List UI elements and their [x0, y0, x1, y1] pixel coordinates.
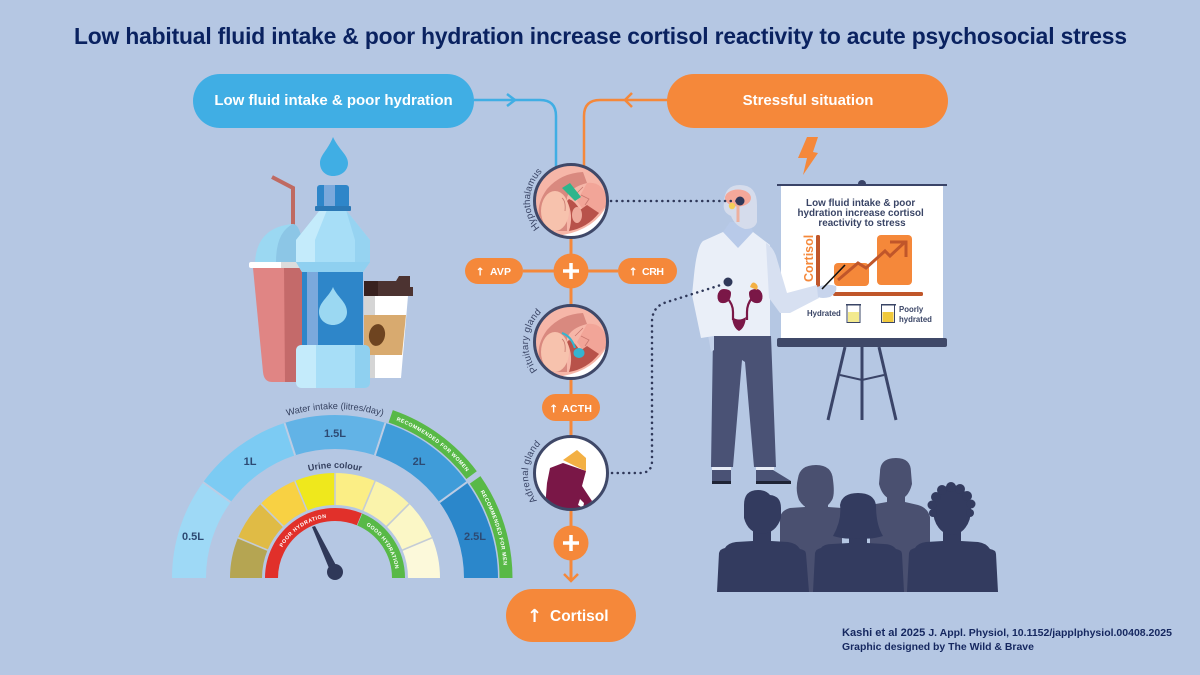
- head: [724, 185, 757, 229]
- presenter figure: [692, 185, 845, 484]
- chart: urine colour gauge: [230, 462, 440, 580]
- front row person one: [717, 490, 809, 592]
- pill: stressful situation: Stressful situation: [743, 92, 873, 109]
- easel legs: [828, 347, 896, 420]
- legend: hydrated: [807, 304, 861, 322]
- pill: cortisol: ↑: [527, 606, 542, 627]
- connector: blue arrow from low fluid intake to hypothalamus: [474, 94, 556, 168]
- organ: adrenal gland: [534, 436, 608, 510]
- pill: low fluid intake: Low fluid intake & poor hydration: [214, 92, 453, 109]
- pill: CRH: ↑: [628, 266, 638, 278]
- left hand: [708, 335, 714, 352]
- band: recommended for women: [388, 410, 477, 479]
- pill: AVP: ↑: [476, 266, 485, 278]
- water volume labels: 2L: [413, 456, 426, 468]
- band: poor hydration: [265, 508, 362, 578]
- label: urine colour: Urine colour: [308, 462, 362, 471]
- water volume labels: 1.5L: [324, 428, 346, 440]
- board heading: hydration increase cortisol: [798, 208, 924, 219]
- back row person left: [780, 465, 842, 592]
- pill: AVP: AVP: [490, 266, 511, 278]
- board heading: reactivity to stress: [818, 218, 906, 229]
- water volume labels: [182, 428, 486, 543]
- pill: AVP: [465, 258, 523, 284]
- pill: stressful situation: [667, 74, 948, 128]
- water volume labels: 2.5L: [464, 531, 486, 543]
- band: good hydration: [357, 514, 405, 578]
- board chart: cortisol: [802, 235, 923, 296]
- pill: ACTH: ↑: [549, 402, 558, 416]
- right arm: [766, 243, 819, 313]
- citation: [842, 627, 1172, 653]
- citation: Kashi et al 2025 J. Appl. Physiol, 10.1152/japplphysiol.00408.2025: [842, 627, 1172, 639]
- title: Low habitual fluid intake & poor hydration increase cortisol reactivity to acute psychosocial stress: [74, 23, 1127, 49]
- water volume labels: 1L: [244, 456, 257, 468]
- icon: water bottle: [296, 185, 370, 388]
- kidneys and bladder: [718, 282, 762, 331]
- hand and pointer: [817, 265, 845, 298]
- icon: drinks group: [249, 177, 413, 388]
- band: poor hydration: POOR HYDRATION: [279, 514, 326, 548]
- label: water intake: Water intake (litres/day): [286, 402, 384, 417]
- node: plus: [554, 254, 588, 288]
- back row person right: [870, 458, 930, 592]
- shoes: [712, 467, 791, 484]
- label: adrenal gland: Adrenal gland: [521, 440, 540, 502]
- pill: CRH: [618, 258, 677, 284]
- label: pituitary gland: Pituitary gland: [522, 308, 541, 374]
- pill: cortisol: Cortisol: [550, 608, 609, 625]
- shirt: [692, 232, 770, 338]
- pill: ACTH: [542, 394, 600, 421]
- icon: lightning bolt: [798, 137, 818, 175]
- gauge segments: water volume: [189, 432, 481, 578]
- icon: water drop: [320, 137, 348, 176]
- legend: poorly hydrated: Poorly: [899, 305, 924, 314]
- band: good hydration: GOOD HYDRATION: [366, 523, 399, 568]
- icon: coffee cup: [364, 276, 413, 378]
- presentation board: [777, 180, 947, 420]
- audience silhouettes: [717, 458, 998, 592]
- pill: CRH: CRH: [642, 266, 664, 278]
- organ: pituitary gland: [534, 306, 611, 382]
- label: hypothalamus: Hypothalamus: [523, 169, 542, 231]
- legend: poorly hydrated: [881, 304, 932, 324]
- neck: [723, 222, 753, 248]
- water volume labels: 0.5L: [182, 531, 204, 543]
- brain: [725, 190, 751, 222]
- gauge segments: urine colours: [246, 489, 424, 578]
- dotted link: adrenal gland to kidney: [612, 278, 732, 473]
- band: recommended for men: RECOMMENDED FOR MEN: [480, 490, 508, 565]
- board chart: cortisol: Cortisol: [802, 235, 816, 282]
- front row person two: [813, 493, 904, 592]
- icon: smoothie cup: [249, 177, 303, 382]
- citation: Graphic designed by The Wild & Brave: [842, 642, 1034, 653]
- legend: hydrated: Hydrated: [807, 309, 841, 318]
- band: recommended for women: RECOMMENDED FOR WOMEN: [396, 417, 469, 472]
- band: recommended for men: [470, 476, 512, 578]
- legend: poorly hydrated: hydrated: [899, 315, 932, 324]
- connector: central pathway lines: [523, 238, 618, 581]
- trousers: [711, 336, 776, 467]
- pill: low fluid intake: [193, 74, 474, 128]
- pill: cortisol: [506, 589, 636, 642]
- pill: ACTH: ACTH: [562, 403, 592, 415]
- gauge needle: [312, 526, 343, 580]
- connector: orange arrow from stressful situation to hypothalamus: [584, 93, 667, 168]
- node: plus: [554, 526, 588, 560]
- front row person three: [907, 482, 998, 592]
- chart: water intake gauge: [172, 402, 512, 578]
- dotted link: hypothalamus to brain: [611, 196, 744, 206]
- board heading: Low fluid intake & poor: [806, 198, 915, 209]
- organ: hypothalamus: [534, 164, 611, 241]
